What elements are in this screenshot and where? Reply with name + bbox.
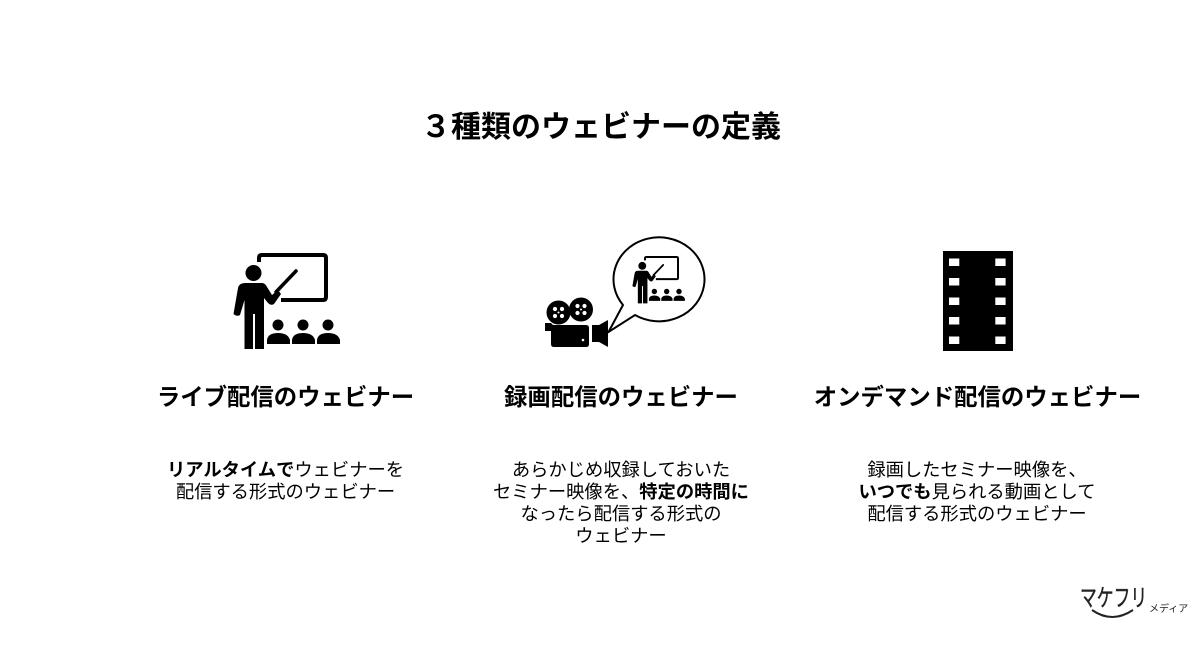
panel: live webinar [157, 253, 414, 502]
text: on-demand webinar description: 配信する形式のウェビナー [867, 503, 1087, 524]
title: ３種類のウェビナーの定義 [421, 111, 781, 144]
icon: presenter with audience [234, 253, 340, 349]
text: live webinar description [167, 459, 404, 502]
logo: makefuri media [1080, 584, 1188, 618]
heading: live webinar: ライブ配信のウェビナー [157, 384, 414, 410]
text: recorded webinar description: ウェビナー [575, 525, 667, 546]
text: recorded webinar description: セミナー映像を、特定の時間に [493, 481, 749, 502]
text: live webinar description: 配信する形式のウェビナー [176, 481, 395, 502]
text: live webinar description: リアルタイムでウェビナーを [167, 459, 404, 480]
panel: recorded webinar [493, 236, 749, 546]
icon: film strip [943, 251, 1013, 351]
logo wordmark: マケフリ [1080, 584, 1147, 612]
text: on-demand webinar description: 録画したセミナー映像を、 [867, 459, 1087, 480]
logo smile [1092, 609, 1134, 618]
panel: on-demand webinar [814, 251, 1141, 524]
text: recorded webinar description [493, 459, 749, 546]
heading: on-demand webinar: オンデマンド配信のウェビナー [814, 384, 1141, 410]
logo subtitle: メディア [1149, 604, 1188, 615]
text: on-demand webinar description: いつでも見られる動画として [858, 481, 1096, 502]
text: recorded webinar description: あらかじめ収録しておいた [512, 459, 730, 480]
text: recorded webinar description: なったら配信する形式の [520, 503, 722, 524]
text: on-demand webinar description [858, 459, 1096, 524]
icon: movie camera with speech bubble [545, 236, 706, 347]
heading: recorded webinar: 録画配信のウェビナー [504, 384, 738, 410]
